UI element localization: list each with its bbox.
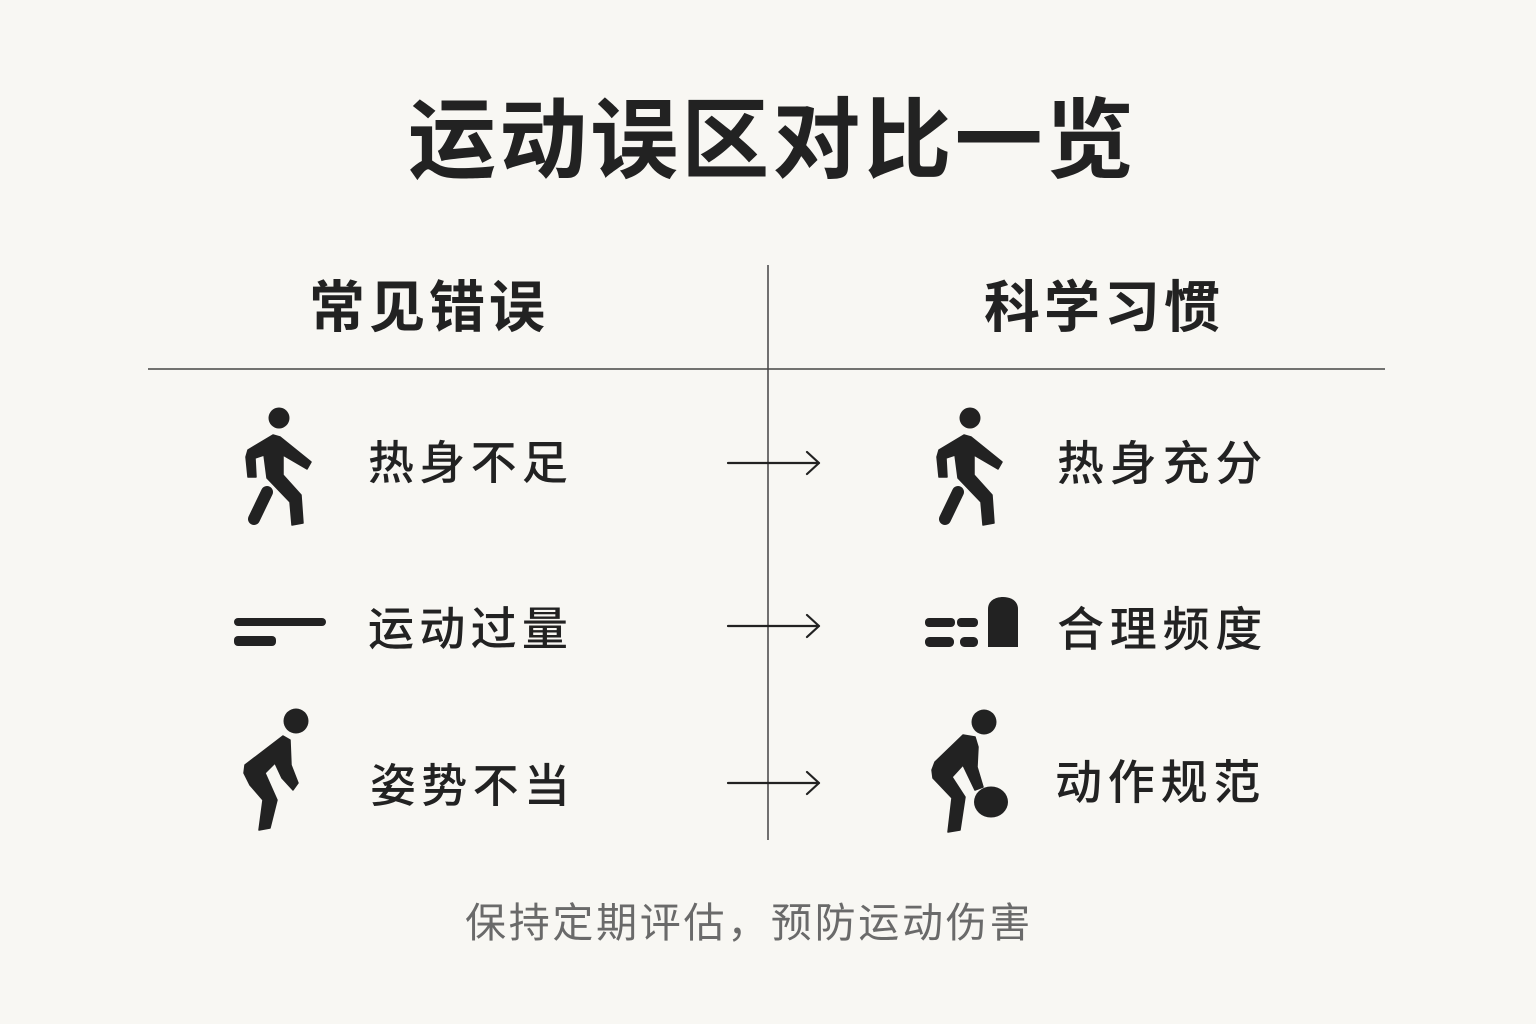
icon: overtraining bars: [234, 618, 326, 646]
icon: bent figure: [244, 708, 308, 830]
label: improper posture: 姿势不当: [370, 760, 575, 812]
label: overtraining: 运动过量: [368, 603, 573, 655]
footer note: 保持定期评估，预防运动伤害: [465, 900, 1033, 946]
label: insufficient warm-up: 热身不足: [368, 437, 573, 489]
heading: common mistakes: 常见错误: [309, 276, 549, 339]
icon: walker, right row 1: [937, 408, 1002, 525]
label: correct form: 动作规范: [1055, 756, 1266, 809]
arrow row 3: [728, 772, 819, 794]
icon: walker, left row 1: [246, 408, 311, 525]
title: 运动误区对比一览: [408, 91, 1137, 190]
label: reasonable frequency: 合理频度: [1057, 603, 1268, 656]
icon: balanced bars and block: [925, 597, 1018, 647]
arrow row 2: [728, 615, 819, 637]
icon: figure lifting ball: [932, 710, 1008, 832]
arrow row 1: [728, 452, 819, 474]
label: sufficient warm-up: 热身充分: [1057, 437, 1268, 490]
heading: scientific habits: 科学习惯: [984, 276, 1224, 339]
